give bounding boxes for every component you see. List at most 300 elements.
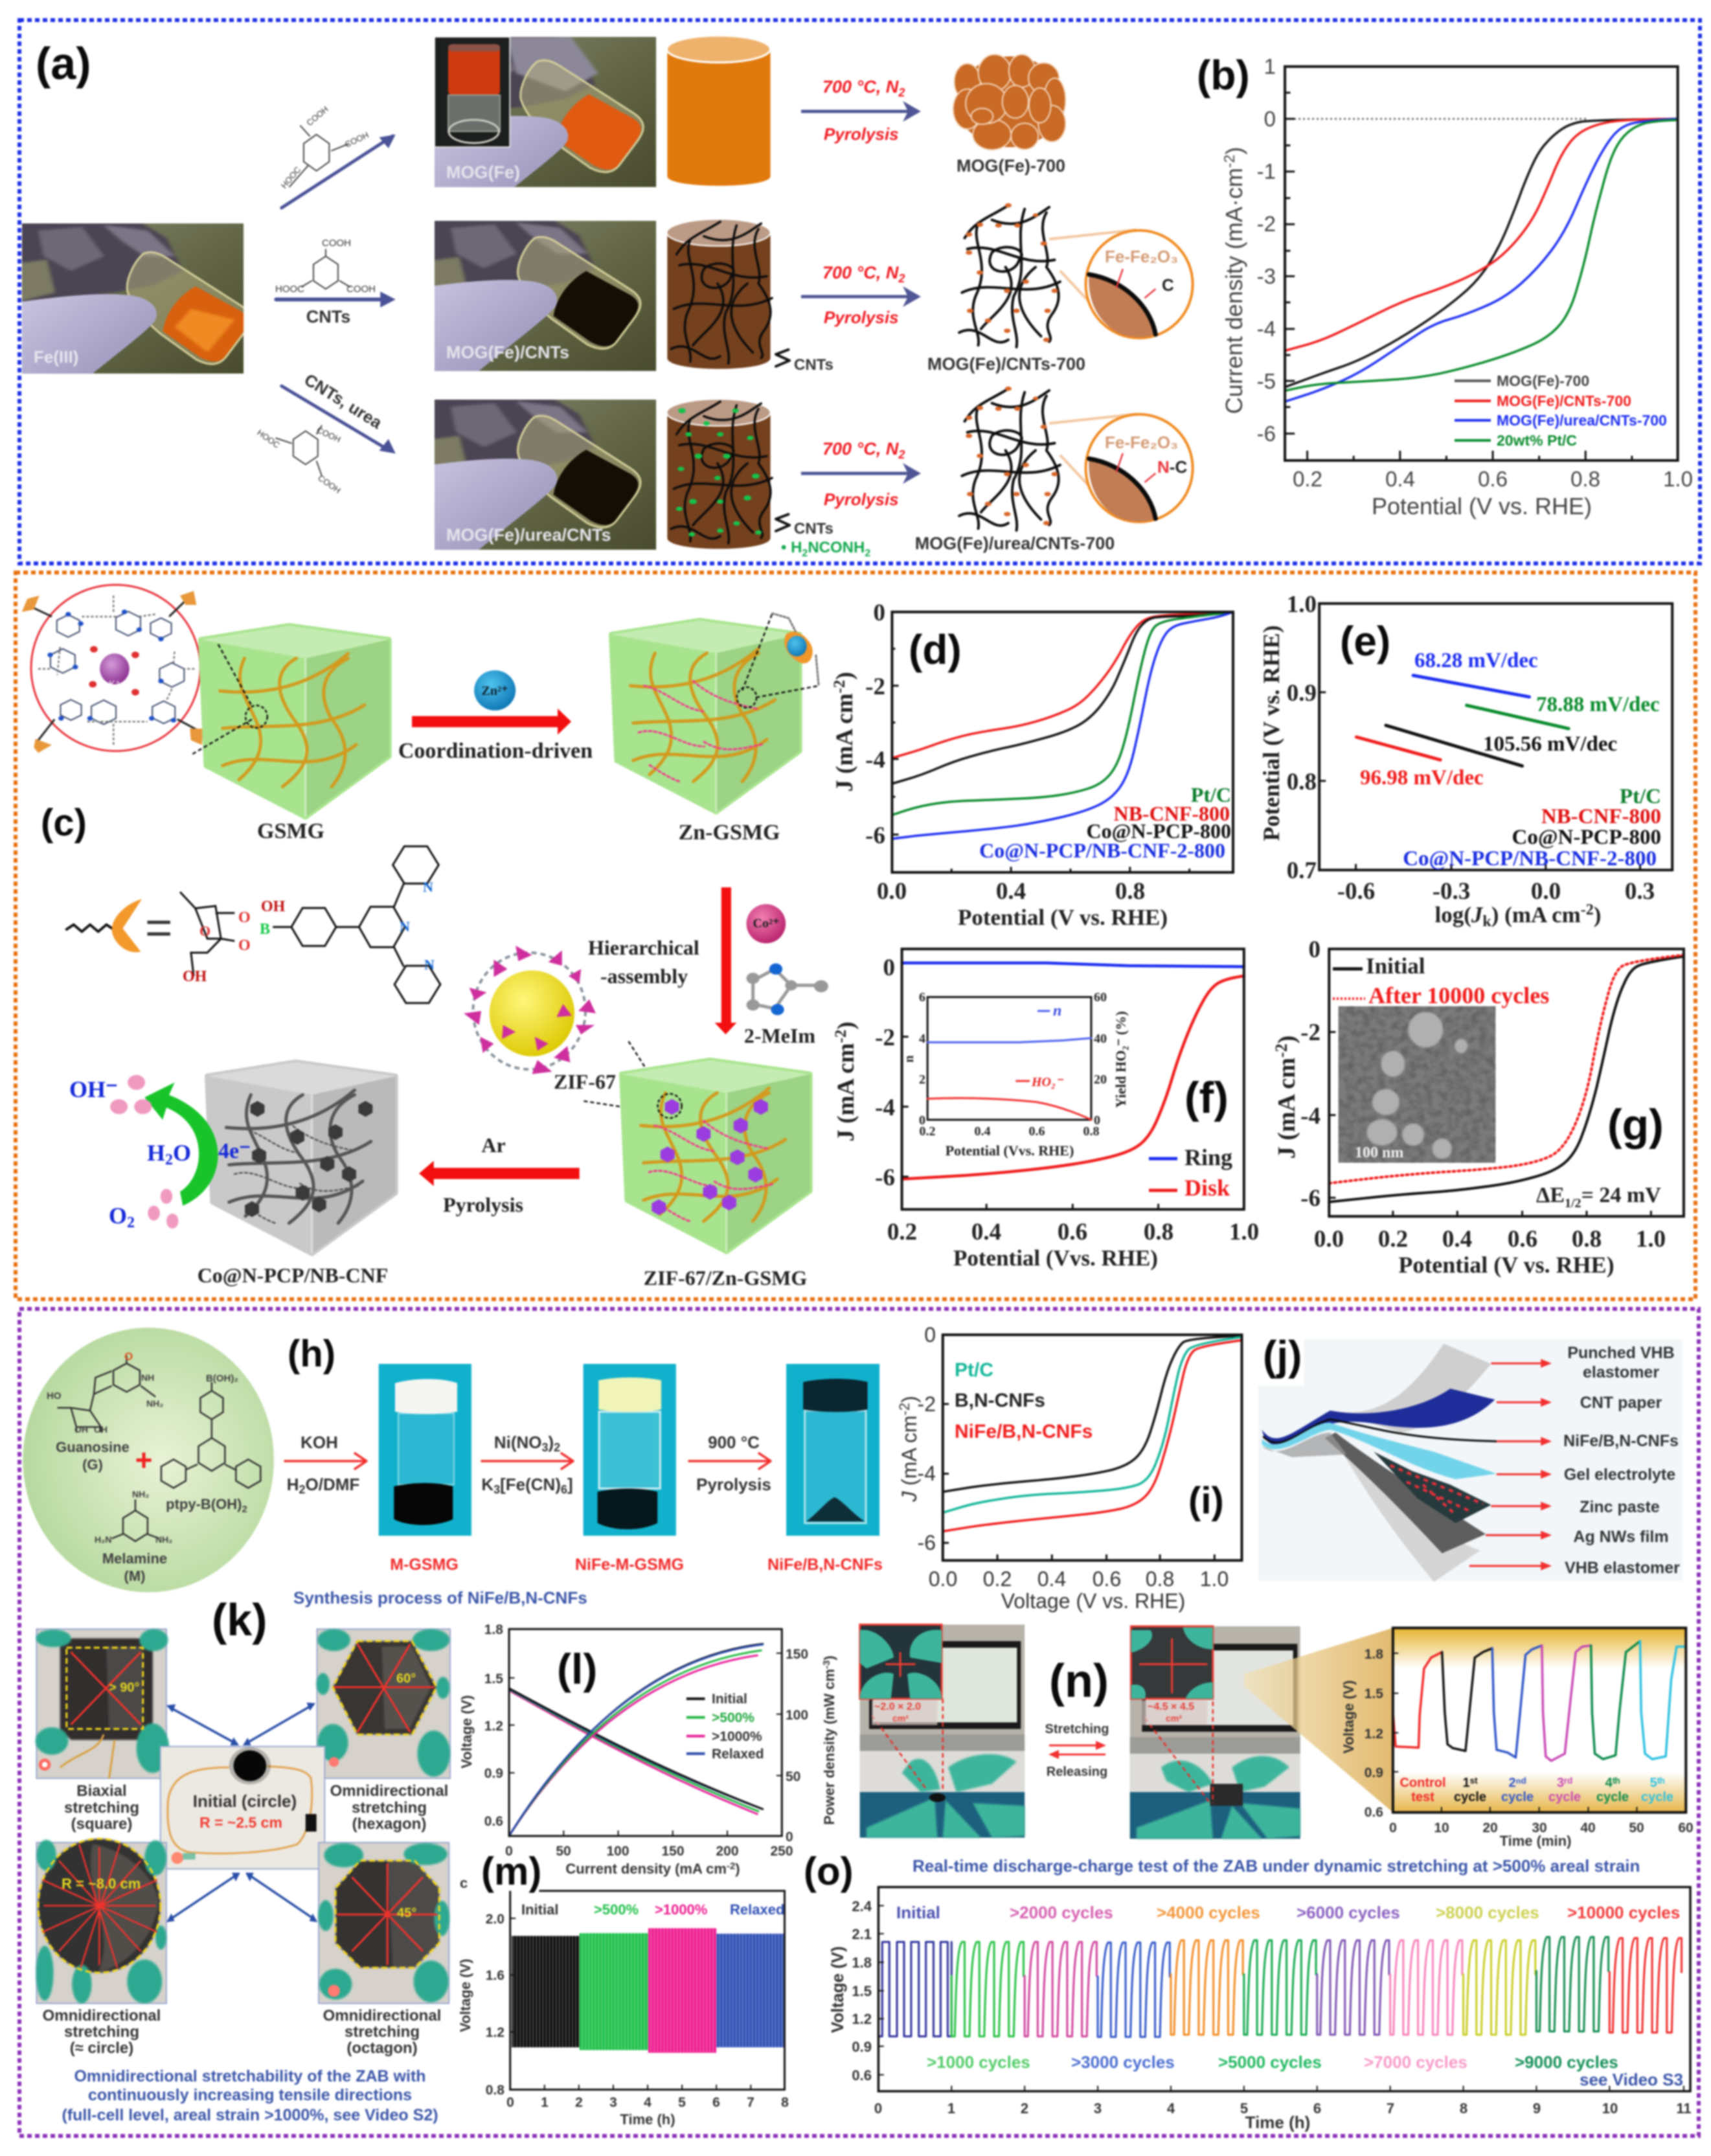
inset: electron number and peroxide yield: n <box>1053 1003 1061 1019</box>
chart: o long term cycling: 3 <box>1094 2100 1102 2116</box>
diagram: precursor molecules circle: HO <box>47 1390 62 1401</box>
cycle labels: >1000 cycles <box>927 2052 1030 2072</box>
chart: f RRDE ring and disk: 0 <box>883 955 895 981</box>
cycle labels: >7000 cycles <box>1364 2052 1467 2072</box>
legend: Co@N-PCP/NB-CNF-2-800 <box>1403 847 1657 870</box>
photo: initial circle: R = ~2.5 cm <box>199 1814 282 1831</box>
chart: i polarization curves: ) <box>898 1396 921 1403</box>
legend: Co@N-PCP-800 <box>1087 819 1231 843</box>
photo: omnidirectional octagon: 45° <box>397 1906 416 1920</box>
chart: m cycling: 2.0 <box>486 1912 504 1927</box>
chart: m cycling: 0 <box>506 2095 514 2110</box>
diagram: oxygen reduction cycle arrow: 2 <box>127 1214 135 1231</box>
legend <box>979 783 1231 862</box>
chart: b polarization curves: 0 <box>1264 107 1276 131</box>
chart: n dynamic stretching voltage: 1.5 <box>1365 1686 1383 1701</box>
product: MOG(Fe)/CNTs-700 network with magnifier: C <box>1162 275 1174 295</box>
photo: omnidirectional hexagon: (hexagon) <box>352 1815 426 1833</box>
diagram: precursor molecules circle: Melamine <box>102 1550 167 1567</box>
chart: l power density: 150 <box>786 1647 808 1662</box>
arrow: to MOG(Fe)/CNTs with molecule: COOH <box>346 284 376 295</box>
chart: o long term cycling: 1.5 <box>852 1983 872 1999</box>
layer labels: CNT paper <box>1580 1394 1662 1412</box>
legend <box>955 1359 1093 1442</box>
chart: e Tafel slopes: 0.8 <box>1287 769 1317 795</box>
chart: n dynamic stretching voltage: 1.8 <box>1365 1647 1383 1662</box>
chart: b polarization curves: 1 <box>1264 54 1276 78</box>
chart: l power density: 200 <box>716 1844 739 1859</box>
slope labels: 105.56 mV/dec <box>1483 732 1617 756</box>
legend: = 24 mV <box>1581 1183 1661 1207</box>
legend: 1/2 <box>1565 1196 1581 1210</box>
photo: unstretched battery on bench: cm² <box>892 1713 909 1723</box>
chart: f RRDE ring and disk: 0.8 <box>1144 1219 1173 1245</box>
cycle labels: cycle <box>1454 1790 1486 1804</box>
chart: f RRDE ring and disk: 0.6 <box>1058 1219 1087 1245</box>
chart: o long term cycling: 1.2 <box>852 2011 872 2027</box>
arrow: coordination-driven with Zn ion <box>398 670 593 763</box>
heading: (i): (i) <box>1188 1480 1224 1522</box>
chart: n dynamic stretching voltage: Time (min) <box>1500 1833 1571 1849</box>
legend: Pt/C <box>1191 783 1231 806</box>
chart: i polarization curves: -2 <box>896 1403 912 1415</box>
arrow: KOH step: O/DMF <box>306 1475 359 1494</box>
chart: b polarization curves: 0.2 <box>1293 467 1322 491</box>
legend: Ring <box>1184 1144 1232 1170</box>
legend <box>1403 785 1661 870</box>
icon: CNT urea gel cylinder: NCONH <box>808 539 865 556</box>
chart: e Tafel slopes: -0.3 <box>1433 878 1470 905</box>
chart: e Tafel slopes: 1.0 <box>1287 591 1317 618</box>
chart: l power density: 250 <box>770 1844 793 1859</box>
caption: synthesis process: Synthesis process of NiFe/B,N-CNFs <box>293 1588 587 1607</box>
photo: MOG(Fe): MOG(Fe) <box>446 163 520 182</box>
chart: b polarization curves: 0.6 <box>1478 467 1508 491</box>
chart: l power density: -2 <box>727 1861 735 1872</box>
diagram: precursor molecules circle: OH <box>94 1424 108 1435</box>
chart: f RRDE ring and disk: -2 <box>832 1030 850 1043</box>
arrow: pyrolysis row 3: 700 °C, N <box>822 439 898 459</box>
chart: m cycling: Voltage (V) <box>457 1958 473 2032</box>
chart: n dynamic stretching voltage: 1.2 <box>1365 1727 1383 1742</box>
photo: omnidirectional circle: R = ~8.0 cm <box>62 1876 141 1892</box>
inset: electron number and peroxide yield: Potential (Vvs. RHE) <box>946 1142 1074 1159</box>
chart: l power density: 0 <box>505 1844 513 1859</box>
heading: (a): (a) <box>36 38 91 89</box>
chart: b polarization curves: -1 <box>1257 159 1276 183</box>
arrow: coordination-driven with Zn ion: Zn²⁺ <box>481 684 508 698</box>
chart: f RRDE ring and disk: J (mA cm <box>833 1043 859 1142</box>
chart: g durability: -2 <box>1272 1043 1291 1058</box>
chart: g durability: -4 <box>1300 1103 1320 1129</box>
chart: f RRDE ring and disk: 0.4 <box>971 1219 1001 1245</box>
photo: Fe(III) vial: Fe(III) <box>34 347 78 367</box>
chart: m cycling: 4 <box>644 2095 652 2110</box>
diagram: ptpy-boronate ligand structure: N <box>400 918 410 935</box>
inset: electron number and peroxide yield: 0 <box>919 1113 925 1128</box>
product: MOG(Fe)/CNTs-700 network with magnifier <box>927 203 1193 374</box>
arrow: Ni and Fe salts step: Ni(NO <box>494 1433 541 1452</box>
inset: electron number and peroxide yield: 40 <box>1094 1032 1107 1046</box>
heading: (n): (n) <box>1049 1655 1109 1707</box>
chart: g durability: ) <box>1273 1036 1300 1043</box>
chart: g durability: 0.0 <box>1314 1226 1344 1253</box>
diagram: ZIF-67 coated sphere: ZIF-67 <box>554 1070 616 1093</box>
caption: omnidirectional stretchability: (full-cell level, areal strain >1000%, see Video S2) <box>62 2106 438 2124</box>
chart: d polarization curves: J (mA cm <box>832 694 858 792</box>
arrows: stretching directions <box>166 1703 317 1922</box>
chart: n dynamic stretching voltage: 60 <box>1678 1821 1694 1835</box>
diagram: precursor molecules circle: ptpy-B(OH) <box>166 1496 242 1512</box>
chart: g durability: 0.6 <box>1508 1226 1537 1253</box>
chart: i polarization curves: -4 <box>918 1462 936 1485</box>
chart: o long term cycling: 1.8 <box>852 1955 872 1971</box>
cycle labels: >3000 cycles <box>1071 2052 1175 2072</box>
slope labels: 96.98 mV/dec <box>1360 766 1484 789</box>
layer labels: elastomer <box>1583 1363 1659 1381</box>
chart: l power density: 1.5 <box>484 1672 503 1686</box>
chart: d polarization curves: -4 <box>865 747 885 773</box>
heading: (e): (e) <box>1340 618 1390 664</box>
chart: o long term cycling: 2 <box>1021 2100 1028 2116</box>
cycle labels: 5ᵗʰ <box>1650 1776 1664 1790</box>
heading: (k): (k) <box>212 1594 267 1645</box>
photo: omnidirectional octagon <box>318 1843 449 2057</box>
arrow: pyrolysis row 1: Pyrolysis <box>824 124 899 144</box>
legend: Initial <box>1366 953 1425 979</box>
inset: electron number and peroxide yield: 0.8 <box>1083 1124 1100 1139</box>
icon: CNT urea gel cylinder: • H <box>781 539 802 556</box>
layer labels: VHB elastomer <box>1565 1559 1680 1577</box>
chart: f RRDE ring and disk: 0.2 <box>887 1219 917 1245</box>
chart: o long term cycling: 0.9 <box>852 2039 872 2055</box>
chart: e Tafel slopes: 0.3 <box>1625 878 1655 905</box>
chart: o long term cycling: 4 <box>1167 2100 1175 2116</box>
photo: biaxial stretching square <box>36 1629 169 1833</box>
chart: d polarization curves: -2 <box>865 674 885 700</box>
labels: strain states: Relaxed <box>730 1901 784 1918</box>
heading: (c): (c) <box>41 802 87 844</box>
cycle labels: cycle <box>1501 1790 1534 1804</box>
photo: MOG(Fe)/CNTs: MOG(Fe)/CNTs <box>446 343 569 362</box>
arrow: Ni and Fe salts step: ] <box>567 1475 573 1494</box>
cycle labels: >2000 cycles <box>1010 1903 1113 1922</box>
photo: omnidirectional hexagon: 60° <box>396 1672 416 1686</box>
photo: omnidirectional hexagon: Omnidirectional <box>330 1782 448 1800</box>
arrow: to MOG(Fe) with molecule: COOH <box>343 130 370 150</box>
chart: d polarization curves: 0.4 <box>996 878 1026 905</box>
chart: m cycling: 5 <box>678 2095 686 2110</box>
chart: l power density: 100 <box>786 1708 808 1723</box>
photo: Fe(III) vial <box>21 222 245 375</box>
chart: b polarization curves: -4 <box>1257 317 1276 341</box>
photo: omnidirectional octagon: stretching <box>345 2023 420 2041</box>
chart: m cycling: 6 <box>712 2095 720 2110</box>
chart: b polarization curves: -2 <box>1257 212 1276 236</box>
legend: NB-CNF-800 <box>1113 802 1230 825</box>
cycle labels <box>896 1903 1683 2089</box>
diagram: ptpy-boronate ligand structure: N <box>424 957 435 973</box>
photo: NiFe/B,N-CNFs vial <box>767 1364 883 1574</box>
cycle labels: see Video S3 <box>1580 2070 1683 2089</box>
chart: i polarization curves: 0.2 <box>983 1567 1012 1591</box>
diagram: precursor molecules circle: Guanosine <box>56 1439 130 1455</box>
arrow: pyrolysis row 2: 700 °C, N <box>822 263 898 282</box>
arrow: pyrolysis row 1: 700 °C, N <box>822 77 898 96</box>
photo: NiFe-M-GSMG vial <box>575 1364 684 1574</box>
diagram: precursor molecules circle: B(OH)₂ <box>206 1373 238 1384</box>
photo: biaxial stretching square: (square) <box>71 1815 132 1833</box>
arrow: to MOG(Fe)/CNTs with molecule: COOH <box>322 238 351 249</box>
product: MOG(Fe)/CNTs-700 network with magnifier: MOG(Fe)/CNTs-700 <box>927 354 1085 374</box>
labels: strain states: >500% <box>594 1901 639 1918</box>
chart: g durability: J (mA cm <box>1273 1058 1300 1159</box>
arrow: pyrolysis row 3 <box>801 439 921 509</box>
legend: Co@N-PCP-800 <box>1512 826 1661 849</box>
arrow: Ni and Fe salts step: ) <box>548 1433 554 1452</box>
photo: MOG(Fe)/urea/CNTs <box>433 398 657 551</box>
inset: electron number and peroxide yield: Yield HO₂⁻ (%) <box>1113 1011 1129 1108</box>
icon: CNT urea gel cylinder <box>667 399 870 559</box>
legend <box>1149 1144 1232 1201</box>
photo: omnidirectional octagon: (octagon) <box>346 2039 418 2057</box>
chart: b polarization curves: -2 <box>1221 155 1238 168</box>
chart: b polarization curves: ) <box>1221 147 1247 155</box>
chart: l power density: 1.8 <box>484 1622 503 1637</box>
photo: initial circle: Initial (circle) <box>193 1791 297 1811</box>
chart: l power density: Voltage (V) <box>459 1695 475 1769</box>
arrow: Ni and Fe salts step: K <box>481 1475 493 1494</box>
arrow: pyrolysis step <box>689 1433 771 1494</box>
chart: m cycling: Time (h) <box>620 2111 675 2128</box>
arrow: pyrolysis row 1: 2 <box>898 86 905 99</box>
inset: electron number and peroxide yield: 2 <box>919 1072 925 1087</box>
cycle labels: cycle <box>1548 1790 1581 1804</box>
chart: l power density: ) <box>821 1655 837 1661</box>
chart: b polarization curves <box>1221 54 1693 519</box>
chart: o long term cycling: 1 <box>947 2100 955 2116</box>
chart: n dynamic stretching voltage <box>1244 1628 1694 1849</box>
diagram: oxygen reduction cycle arrow: 2 <box>165 1152 173 1168</box>
chart: e Tafel slopes: 0.0 <box>1531 878 1561 905</box>
chart: b polarization curves: -6 <box>1257 422 1276 446</box>
chart: f RRDE ring and disk: Potential (Vvs. RHE) <box>953 1245 1158 1271</box>
photo: unstretched battery on bench <box>860 1625 1025 1837</box>
arrow: to MOG(Fe)/urea/CNTs with molecule <box>255 370 396 495</box>
chart: n dynamic stretching voltage: 40 <box>1580 1821 1596 1835</box>
cycle labels: cycle <box>1596 1790 1629 1804</box>
diagram: Co@N-PCP/NB-CNF grey cube <box>198 1062 396 1287</box>
diagram: ZIF-67 coated sphere <box>464 946 667 1114</box>
product: MOG(Fe)/urea/CNTs-700 network with magnifier <box>915 387 1193 553</box>
chart: g durability: 0.4 <box>1442 1226 1472 1253</box>
heading: (b): (b) <box>1197 52 1250 98</box>
layer labels: Zinc paste <box>1580 1498 1660 1516</box>
chart: o long term cycling: 2.4 <box>852 1898 872 1914</box>
chart: f RRDE ring and disk: ) <box>833 1021 859 1030</box>
diagram: oxygen reduction cycle arrow: OH⁻ <box>69 1076 118 1102</box>
chart: e Tafel slopes: 0.7 <box>1287 857 1317 884</box>
arrow: down to ZIF-67/Zn-GSMG: 2-MeIm <box>744 1024 815 1047</box>
arrow: KOH step: 2 <box>299 1483 306 1496</box>
chart: l power density: ) <box>735 1861 740 1877</box>
diagram: ptpy-boronate ligand structure: B <box>260 921 270 938</box>
arrow: pyrolysis row 2: Pyrolysis <box>824 308 899 327</box>
arrow: Ni and Fe salts step: 3 <box>541 1441 548 1454</box>
chart: o long term cycling: 0.6 <box>852 2067 872 2083</box>
arrow: pyrolysis row 1 <box>801 77 921 144</box>
icon: CNT gel cylinder <box>667 219 833 374</box>
chart: l power density: >1000% <box>712 1729 762 1744</box>
icon: CNT urea gel cylinder: 2 <box>802 548 808 559</box>
arrow: to MOG(Fe)/urea/CNTs with molecule: CNTs, urea <box>301 370 386 433</box>
chart: m cycling: 1 <box>541 2095 549 2110</box>
legend: B,N-CNFs <box>955 1390 1045 1411</box>
icon: orange gel cylinder <box>667 36 771 186</box>
chart: e Tafel slopes: log(J <box>1435 902 1482 927</box>
arrow: pyrolysis row 2: 2 <box>898 272 905 285</box>
diagram: precursor molecules circle: (G) <box>82 1457 103 1473</box>
chart: i polarization curves <box>896 1323 1241 1613</box>
chart: d polarization curves: ) <box>832 672 858 680</box>
diagram: precursor molecules circle: NH₂ <box>155 1534 172 1545</box>
chart: b polarization curves: 0.4 <box>1385 467 1415 491</box>
cycle labels: 2ⁿᵈ <box>1509 1776 1526 1790</box>
inset: electron number and peroxide yield: n <box>902 1055 916 1063</box>
arrow: pyrolysis step: Pyrolysis <box>696 1475 771 1494</box>
arrow: down to ZIF-67/Zn-GSMG: Co²⁺ <box>753 916 780 931</box>
inset: electron number and peroxide yield: 60 <box>1094 990 1107 1004</box>
legend: NB-CNF-800 <box>1541 805 1661 828</box>
photo: omnidirectional circle: Omnidirectional <box>43 2007 161 2025</box>
inset: electron number and peroxide yield: 0 <box>1094 1113 1100 1128</box>
legend: Pt/C <box>955 1359 993 1381</box>
arrow: down to ZIF-67/Zn-GSMG: -assembly <box>600 964 688 988</box>
cycle labels: >4000 cycles <box>1157 1903 1260 1922</box>
arrow: Ni and Fe salts step <box>481 1433 573 1496</box>
photo: omnidirectional hexagon: stretching <box>352 1799 427 1817</box>
product: MOG(Fe)/urea/CNTs-700 network with magnifier: MOG(Fe)/urea/CNTs-700 <box>915 534 1115 553</box>
panel: MOG(Fe) synthesis and ORR, parts a and b <box>17 20 1700 563</box>
diagram: precursor molecules circle: NH₂ <box>146 1398 163 1409</box>
chart: i polarization curves: J (mA cm <box>898 1415 921 1502</box>
cycle labels: 4ᵗʰ <box>1605 1776 1620 1790</box>
photo: stretched battery on bench: ~4.5 × 4.5 <box>1148 1701 1194 1712</box>
diagram: oxygen reduction cycle arrow: O <box>173 1140 191 1166</box>
product: MOG(Fe)/urea/CNTs-700 network with magnifier: N-C <box>1157 457 1187 477</box>
product: MOG(Fe)/CNTs-700 network with magnifier: Fe-Fe₂O₃ <box>1105 247 1178 266</box>
caption: real-time test: Real-time discharge-charge test of the ZAB under dynamic stretching at >500% areal strain <box>912 1856 1640 1876</box>
diagram: ptpy-boronate ligand structure: OH <box>261 898 286 915</box>
chart: m cycling: 8 <box>781 2095 789 2110</box>
chart: l power density <box>459 1622 837 1877</box>
chart: l power density: 0 <box>786 1830 793 1844</box>
legend <box>1333 953 1661 1210</box>
arrow: pyrolysis under Ar: Pyrolysis <box>443 1193 523 1216</box>
chart: l power density: -3 <box>821 1661 832 1669</box>
chart: f RRDE ring and disk: -6 <box>875 1164 895 1191</box>
chart: e Tafel slopes <box>1258 591 1672 930</box>
chart: m cycling: 1.2 <box>486 2025 504 2040</box>
arrow: pyrolysis under Ar: Ar <box>481 1133 506 1157</box>
chart: n dynamic stretching voltage: 50 <box>1629 1821 1644 1835</box>
photo: MOG(Fe)/CNTs <box>433 220 657 372</box>
diagram: precursor molecules circle: OH <box>74 1424 88 1435</box>
arrow: pyrolysis step: 900 °C <box>708 1433 760 1452</box>
chart: n dynamic stretching voltage: 20 <box>1482 1821 1498 1835</box>
arrow: Ni and Fe salts step: 3 <box>493 1483 500 1496</box>
caption: omnidirectional stretchability: continuously increasing tensile directions <box>88 2086 412 2104</box>
inset: electron number and peroxide yield: 0.4 <box>974 1124 991 1139</box>
diagram: ZIF-67/Zn-GSMG cube <box>622 1060 810 1289</box>
chart: m cycling: 0.8 <box>486 2083 504 2098</box>
chart: l power density: 150 <box>661 1844 685 1859</box>
slope labels: 68.28 mV/dec <box>1414 649 1538 672</box>
legend <box>1455 372 1667 449</box>
photo: unstretched battery on bench: ~2.0 × 2.0 <box>874 1701 921 1712</box>
photo: omnidirectional hexagon <box>317 1629 450 1833</box>
product: MOG(Fe)/urea/CNTs-700 network with magnifier: Fe-Fe₂O₃ <box>1105 433 1178 452</box>
chart: l power density: 50 <box>786 1769 800 1784</box>
chart: m cycling: 1.6 <box>486 1968 504 1983</box>
diagram: GSMG cube: GSMG <box>257 819 324 843</box>
chart: g durability <box>1272 936 1684 1278</box>
chart: e Tafel slopes: 0.9 <box>1287 680 1317 707</box>
photo: M-GSMG vial <box>379 1364 471 1574</box>
chart: f RRDE ring and disk <box>832 949 1259 1271</box>
product: MOG(Fe)-700 porous blob: MOG(Fe)-700 <box>957 156 1065 176</box>
chart: i polarization curves: -6 <box>918 1531 936 1554</box>
heading: (d): (d) <box>909 626 962 673</box>
diagram: Co@N-PCP/NB-CNF grey cube: Co@N-PCP/NB-CNF <box>198 1264 388 1287</box>
cycle labels: >9000 cycles <box>1515 2052 1618 2072</box>
chart: f RRDE ring and disk: 1.0 <box>1229 1219 1259 1245</box>
inset: electron number and peroxide yield: 0.2 <box>920 1124 935 1139</box>
chart: e Tafel slopes: ) <box>1594 902 1601 927</box>
arrow: Ni and Fe salts step: 6 <box>561 1483 567 1496</box>
heading: (h): (h) <box>288 1333 335 1375</box>
arrow: coordination-driven with Zn ion: Coordination-driven <box>398 739 593 763</box>
legend: After 10000 cycles <box>1368 982 1549 1008</box>
inset: electron number and peroxide yield <box>902 990 1129 1159</box>
arrow: to MOG(Fe) with molecule <box>279 104 396 208</box>
arrow: stretching and releasing: Stretching <box>1045 1722 1109 1736</box>
chart: o long term cycling: 11 <box>1676 2100 1692 2116</box>
arrow: to MOG(Fe)/urea/CNTs with molecule: HOOC <box>255 427 282 450</box>
chart: o long term cycling: 6 <box>1313 2100 1321 2116</box>
chart: b polarization curves: 0.8 <box>1570 467 1600 491</box>
photo: initial circle <box>161 1747 324 1869</box>
icon: CNT urea gel cylinder: CNTs <box>794 520 833 538</box>
chart: f RRDE ring and disk: -2 <box>875 1025 895 1051</box>
inset: electron number and peroxide yield: 4 <box>919 1032 925 1046</box>
panel: GSMG derived catalyst, parts c to g <box>16 573 1695 1299</box>
chart: o long term cycling: 2.1 <box>852 1926 872 1942</box>
product: MOG(Fe)-700 porous blob <box>953 54 1065 176</box>
chart: g durability: -6 <box>1300 1185 1320 1212</box>
diagram: oxygen reduction cycle arrow: H <box>147 1140 165 1166</box>
chart: o long term cycling: 8 <box>1460 2100 1467 2116</box>
chart: l power density: Current density (mA cm <box>565 1861 727 1877</box>
legend: Disk <box>1184 1175 1230 1201</box>
icon: CNT gel cylinder: CNTs <box>794 356 833 374</box>
chart: n dynamic stretching voltage: 0.9 <box>1365 1765 1383 1780</box>
diagram: ptpy-boronate ligand structure: O <box>238 909 251 926</box>
heading: (g): (g) <box>1607 1100 1664 1150</box>
photo: stretched battery on bench: cm² <box>1166 1713 1182 1723</box>
diagram: GSMG cube <box>192 626 389 843</box>
caption: omnidirectional stretchability: Omnidirectional stretchability of the ZAB with <box>74 2067 426 2085</box>
